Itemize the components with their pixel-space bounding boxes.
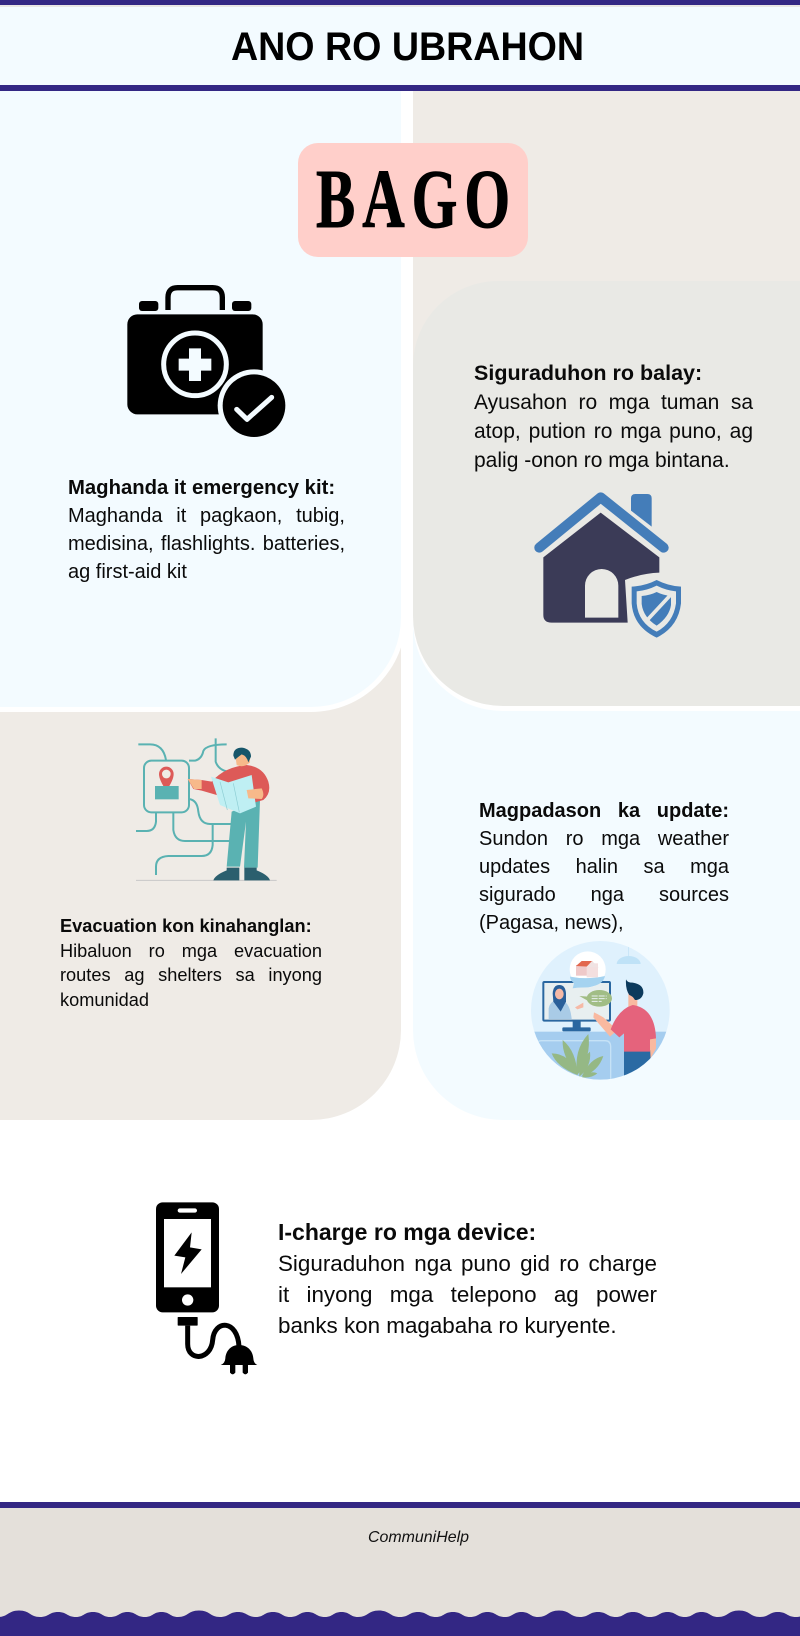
text: emergency kit: medisina, flashlights. batteries, [68, 533, 345, 555]
text: updates: (Pagasa, news), [479, 912, 624, 934]
text: emergency kit [68, 477, 345, 583]
text: secure house: palig -onon ro mga bintana. [474, 449, 730, 472]
icon: phone charging with plug [156, 1202, 258, 1374]
text: updates: Magpadason ka update: [479, 800, 729, 822]
panel: top-right beige background [413, 91, 800, 791]
icon: house with shield [534, 492, 681, 638]
panel: bottom-left beige background [0, 620, 401, 1120]
text: emergency kit: Maghanda it pagkaon, tubig, [68, 505, 345, 527]
illustration: person watching news on monitor [531, 941, 670, 1080]
panel: bottom-right blue background [413, 600, 800, 1120]
text: charge devices: Siguraduhon nga puno gid ro charge [278, 1251, 657, 1276]
header band [0, 0, 800, 91]
footer brand text: CommuniHelp [368, 1529, 469, 1546]
text: emergency kit: Maghanda it emergency kit: [68, 477, 335, 499]
footer wave [0, 1610, 800, 1636]
icon: first aid kit with check [127, 285, 286, 437]
text: secure house [474, 361, 754, 472]
text: charge devices: I-charge ro mga device: [278, 1219, 536, 1245]
halo under grey card [413, 560, 800, 711]
title: ANO RO UBRAHON [231, 25, 584, 69]
text: charge devices [278, 1219, 657, 1338]
text: secure house: Ayusahon ro mga tuman sa [474, 391, 753, 414]
illustration: person with evacuation map [136, 738, 277, 881]
text: evacuation: routes ag shelters sa inyong [60, 965, 322, 985]
panel: top-right grey card [413, 281, 800, 706]
footer band [0, 1502, 800, 1636]
text: evacuation: Evacuation kon kinahanglan: [60, 916, 312, 936]
text: updates: sigurado nga sources [479, 884, 729, 906]
text: updates: Sundon ro mga weather [479, 828, 729, 850]
text: updates [479, 800, 729, 934]
text: secure house: Siguraduhon ro balay: [474, 361, 702, 385]
panel: top-left blue card [0, 91, 401, 707]
text: evacuation [60, 916, 322, 1010]
text: evacuation: komunidad [60, 990, 149, 1010]
badge: BAGO: BAGO [316, 152, 517, 246]
text: charge devices: it inyong mga telepono ag power [278, 1282, 657, 1307]
text: emergency kit: ag first-aid kit [68, 561, 187, 583]
text: secure house: atop, pution ro mga puno, ag [474, 420, 753, 443]
text: updates: updates halin sa mga [479, 856, 729, 878]
divider bar between columns [401, 91, 413, 1120]
text: evacuation: Hibaluon ro mga evacuation [60, 940, 322, 960]
text: charge devices: banks kon magabaha ro kuryente. [278, 1313, 617, 1338]
